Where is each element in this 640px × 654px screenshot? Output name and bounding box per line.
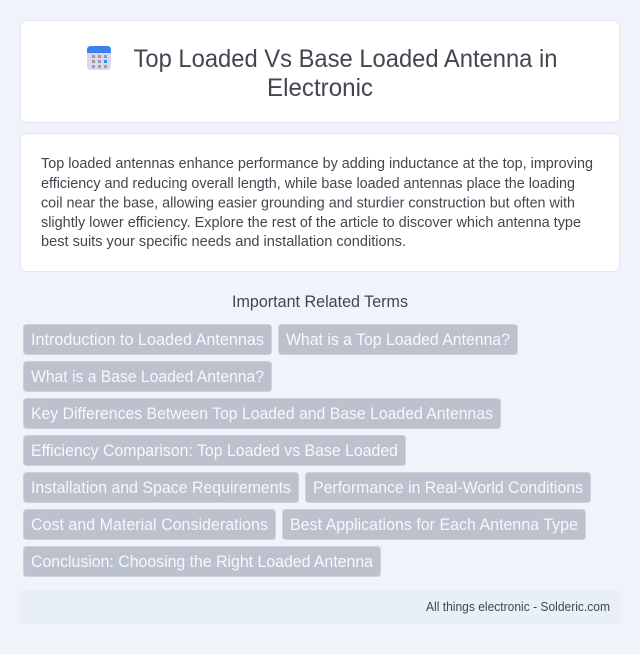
tag bbox=[24, 546, 380, 576]
summary text: best suits your specific needs and installation conditions. bbox=[41, 233, 406, 250]
tag bbox=[24, 472, 298, 502]
tag bbox=[282, 510, 586, 540]
icon: calendar bbox=[87, 46, 111, 70]
heading: important related terms: Important Related Terms bbox=[232, 293, 408, 311]
footer: All things electronic - Solderic.com bbox=[426, 600, 610, 614]
summary text: Top loaded antennas enhance performance by adding inductance at the top, improving bbox=[41, 155, 593, 172]
tag: What is a Base Loaded Antenna? bbox=[31, 367, 264, 386]
tag: Performance in Real-World Conditions bbox=[313, 478, 583, 497]
tag: Best Applications for Each Antenna Type bbox=[290, 515, 578, 534]
tag: Introduction to Loaded Antennas bbox=[31, 330, 264, 349]
tag bbox=[24, 324, 272, 354]
title: Top Loaded Vs Base Loaded Antenna in bbox=[134, 45, 558, 73]
tag bbox=[24, 436, 406, 466]
summary text: slightly lower efficiency. Explore the rest of the article to discover which antenna type bbox=[41, 214, 581, 231]
summary text: efficiency and reducing overall length, while base loaded antennas place the loading bbox=[41, 175, 575, 192]
summary text bbox=[41, 155, 593, 250]
tag bbox=[24, 510, 276, 540]
tag: Cost and Material Considerations bbox=[31, 515, 268, 534]
title: Electronic bbox=[267, 74, 373, 102]
footer bbox=[20, 590, 620, 624]
tag: Efficiency Comparison: Top Loaded vs Base Loaded bbox=[31, 441, 398, 460]
tag: Key Differences Between Top Loaded and Base Loaded Antennas bbox=[31, 404, 493, 423]
tag bbox=[306, 472, 590, 502]
related term tags bbox=[24, 324, 590, 576]
tag: Installation and Space Requirements bbox=[31, 478, 291, 497]
title bbox=[134, 45, 558, 102]
summary panel bbox=[20, 134, 620, 272]
tag: Conclusion: Choosing the Right Loaded Antenna bbox=[31, 552, 374, 571]
tag bbox=[24, 362, 272, 392]
tag: What is a Top Loaded Antenna? bbox=[286, 330, 510, 349]
summary text: coil near the base, allowing easier grounding and sturdier construction but often with bbox=[41, 194, 575, 212]
tag bbox=[24, 398, 500, 428]
tag bbox=[278, 324, 518, 354]
title panel bbox=[20, 20, 620, 122]
